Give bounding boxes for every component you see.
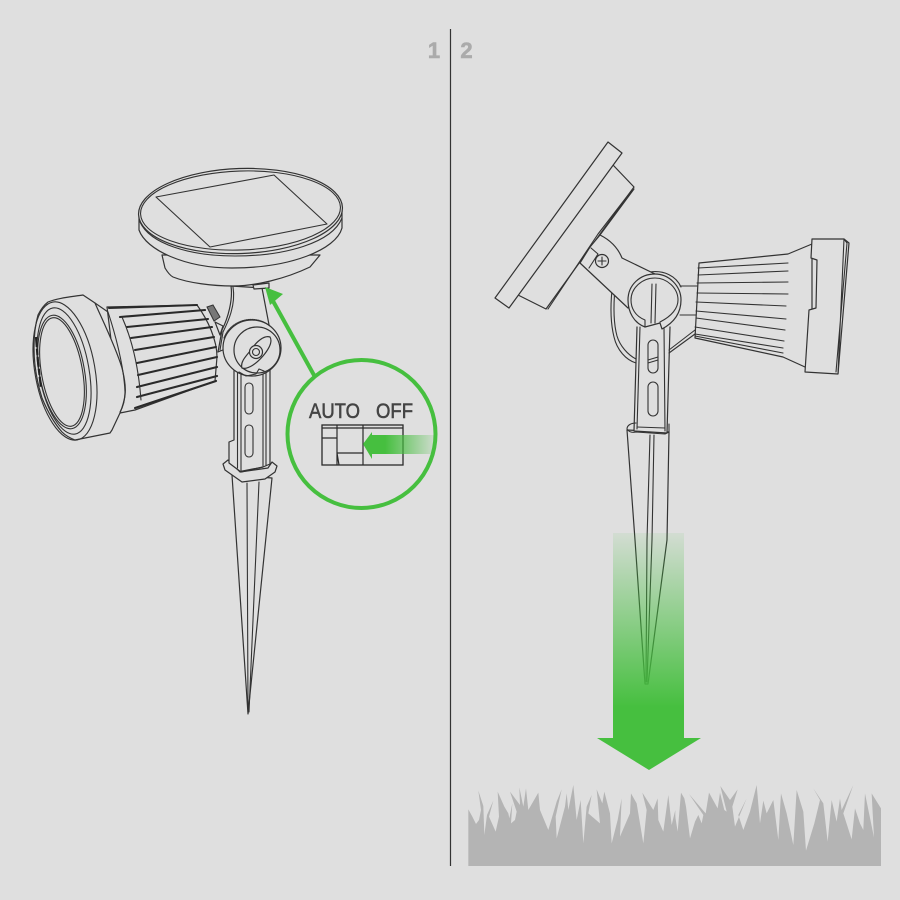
callout: switch detail [288,360,436,508]
step number 1: 1 [428,38,440,63]
spike and sleeve [627,327,670,684]
switch tab [253,283,269,289]
step number 2: 2 [460,38,473,63]
lamp head [23,295,220,445]
grass [468,785,881,866]
center divider [450,29,452,866]
panel 2: spotlight with tilted solar panel [495,142,849,684]
solar panel disc [137,165,344,268]
lens label band [36,337,41,388]
tilted solar panel [495,142,634,309]
mounting arm [215,286,270,352]
lamp fins [109,305,217,408]
lamp fins [695,263,788,353]
switch outline [322,425,403,465]
screw [596,254,608,268]
lens [23,297,107,445]
pointer arrow to switch [265,287,315,377]
lamp head right [695,239,849,374]
green downward arrow [597,533,701,770]
spike and stake [223,368,277,714]
adjustment knob [223,319,281,376]
lamp connection brackets [650,272,697,353]
label AUTO: AUTO [309,400,360,423]
panel arm [580,235,655,308]
lamp housing [34,295,125,440]
wing screw [207,305,220,321]
hub ring [628,274,681,329]
solar panel underside [162,255,320,286]
label OFF: OFF [376,400,413,423]
cable loop [611,288,636,363]
panel 1: spotlight with lamp head facing left [23,165,344,714]
green slide arrow [363,432,434,459]
